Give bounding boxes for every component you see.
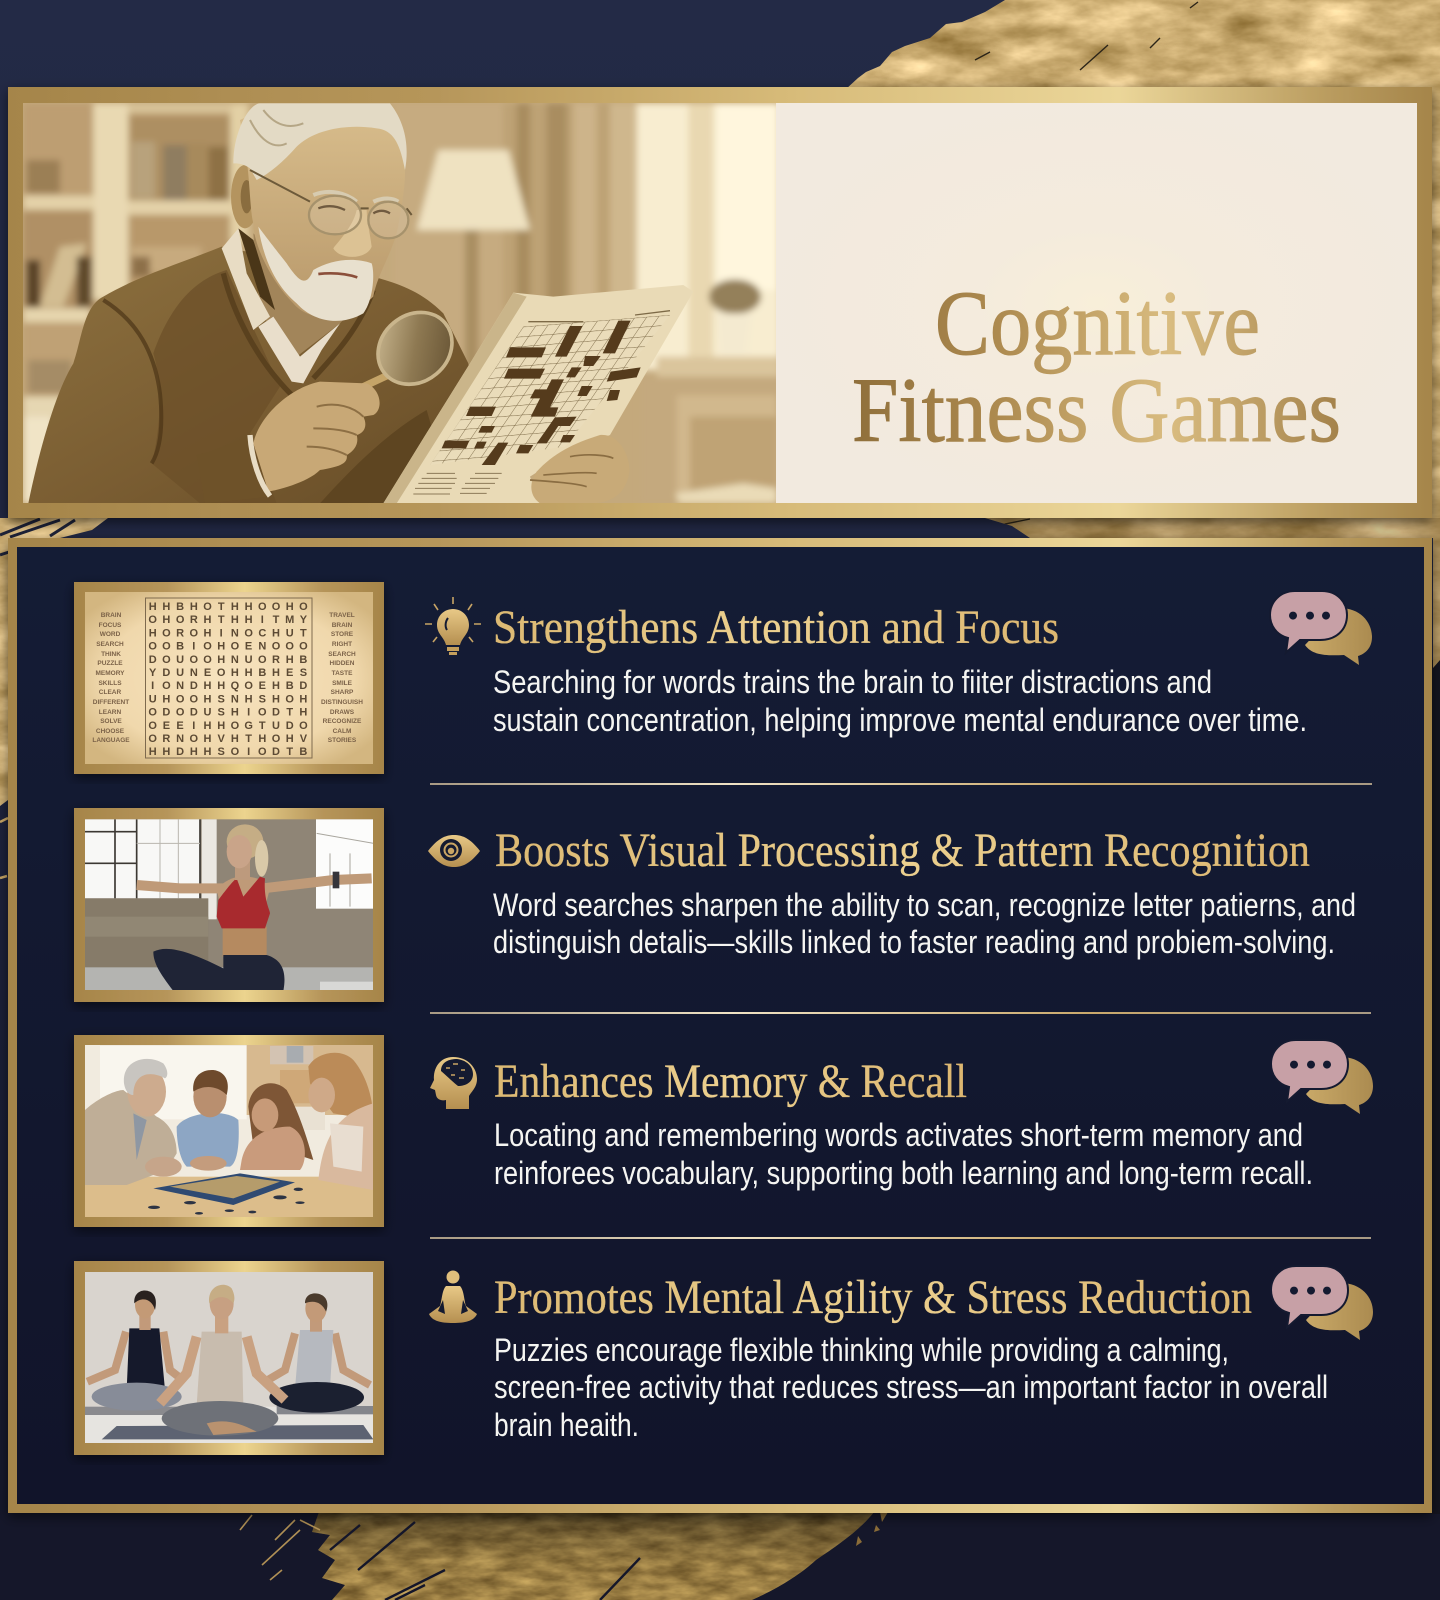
row 1 thumbnail: word search: OEEIHHOGTUDO: [148, 720, 308, 732]
row 1 thumbnail: word search: RIGHT: [332, 641, 352, 648]
row 1 thumbnail: word search: SMILE: [332, 680, 353, 687]
row 1 thumbnail: word search: RECOGNIZE: [323, 718, 362, 725]
row 1 thumbnail: word search: OHORHTHHITMY: [148, 614, 308, 626]
row 4 heading: Promotes Mental Agility & Stress Reduction: [494, 1271, 1252, 1324]
gold flecks on left edge: [0, 818, 8, 878]
row 1 thumbnail: word search: HHBHOTHHOOHO: [149, 601, 308, 613]
row 4 icon: meditating figure: [429, 1270, 477, 1323]
row 3 icon: head with brain: [430, 1057, 477, 1109]
row 4 description: Puzzies encourage flexible thinking while providing a calming,: [494, 1332, 1229, 1368]
row 2 description: [493, 887, 1356, 960]
row 1 icon: light bulb: [425, 597, 481, 655]
row 1 thumbnail: word search: DISTINGUISH: [321, 699, 363, 706]
row 1 icon: chat bubbles: [1270, 591, 1372, 665]
gold brush stroke: top right: [840, 0, 1440, 670]
row 1 thumbnail: word search: HHDHHSOIODTB: [149, 746, 307, 758]
row 1 thumbnail: word search: ODODUSHIODTH: [148, 707, 307, 719]
panel background: [17, 547, 1424, 1504]
row 2 heading: Boosts Visual Processing & Pattern Recognition: [495, 824, 1310, 877]
row 1 description: Searching for words trains the brain to fiiter distractions and: [493, 664, 1212, 700]
row 1 thumbnail: word search: CALM: [333, 728, 351, 735]
row 1 thumbnail: word search: LEARN: [99, 709, 121, 716]
hero title panel: [776, 103, 1417, 503]
gold brush stroke: bottom: [240, 1510, 890, 1600]
row 4 icon: chat bubbles: [1271, 1266, 1373, 1340]
hero panel: [8, 87, 1432, 518]
row 3 description: [494, 1117, 1313, 1191]
row 1 thumbnail: word search: ORNOHVHTHOHV: [148, 733, 308, 745]
row 4 thumbnail: group meditation: [74, 1261, 384, 1455]
row 4 description: brain heaith.: [494, 1407, 639, 1443]
row 1 thumbnail: word search: THINK: [101, 651, 121, 658]
gold brush stroke: left edge: [0, 518, 110, 808]
row 1 thumbnail: word search: STORIES: [328, 737, 357, 744]
row 1 thumbnail: word search: CLEAR: [99, 689, 121, 696]
row 3 thumbnail: family board game: [74, 1035, 384, 1227]
row 1 thumbnail: word search: MEMORY: [95, 670, 125, 677]
row 1 thumbnail: word search: UHOOHSNHSHOH: [149, 693, 307, 705]
row 1 description: [493, 664, 1307, 738]
row 1 thumbnail: word search: OOBIOHOENOOO: [148, 641, 308, 653]
row 3 description: reinforees vocabulary, supporting both learning and long-term recall.: [494, 1155, 1313, 1191]
row 1 thumbnail: word search: SEARCH: [328, 651, 356, 658]
row 1 thumbnail: word search: CHOOSE: [96, 728, 125, 735]
row 1 thumbnail: word search: DIFFERENT: [93, 699, 129, 706]
main panel: [8, 538, 1432, 1513]
row 3 icon: chat bubbles: [1271, 1040, 1373, 1114]
row 1 thumbnail: word search: TRAVEL: [329, 612, 355, 619]
row 1 thumbnail: word search: STORE: [331, 631, 354, 638]
row 1 thumbnail: word search: SOLVE: [100, 718, 122, 725]
row 1 thumbnail: word search: YDUNEOHHBHES: [149, 667, 307, 679]
row 3 description: Locating and remembering words activates short-term memory and: [494, 1117, 1303, 1153]
panel frame: [8, 538, 1432, 1513]
row 1 thumbnail: word search: LANGUAGE: [92, 737, 130, 744]
row 1 thumbnail: word search: PUZZLE: [97, 660, 123, 667]
row 2 thumbnail: woman stretching: [74, 808, 384, 1002]
title: Fitness Games: [852, 359, 1341, 461]
row 1 thumbnail: word search: SEARCH: [96, 641, 124, 648]
row 1 thumbnail: word search: SKILLS: [98, 680, 122, 687]
row 1 description: sustain concentration, helping improve mental endurance over time.: [493, 702, 1307, 738]
row 1 thumbnail: word search: DRAWS: [330, 709, 355, 716]
title: [852, 272, 1341, 461]
row 1 heading: Strengthens Attention and Focus: [493, 601, 1059, 654]
row 1 thumbnail: word search: BRAIN: [101, 612, 122, 619]
row 2 icon: eye: [428, 835, 480, 867]
row 1 thumbnail: word search: HIDDEN: [330, 660, 355, 667]
hero gold frame: [8, 87, 1432, 518]
row 1 thumbnail: word search: BRAIN: [332, 622, 353, 629]
row 1 thumbnail: word search: DOUOOHNUORHB: [149, 654, 307, 666]
row 1 thumbnail: word search: IONDHHQOEHBD: [151, 680, 307, 692]
row 1 thumbnail: word search: FOCUS: [99, 622, 122, 629]
row 4 description: [494, 1332, 1328, 1443]
hero photo: man with crossword: [23, 103, 780, 503]
row 1 thumbnail: word search: SHARP: [331, 689, 354, 696]
row 1 thumbnail: word search: TASTE: [332, 670, 353, 677]
row 1 thumbnail: word search: HOROHINOCHUT: [149, 627, 307, 639]
row 1 thumbnail: word search: WORD: [100, 631, 121, 638]
row 3 heading: Enhances Memory & Recall: [494, 1055, 967, 1108]
title: Cognitive: [935, 272, 1260, 374]
row 1 thumbnail: word search: [74, 582, 384, 774]
